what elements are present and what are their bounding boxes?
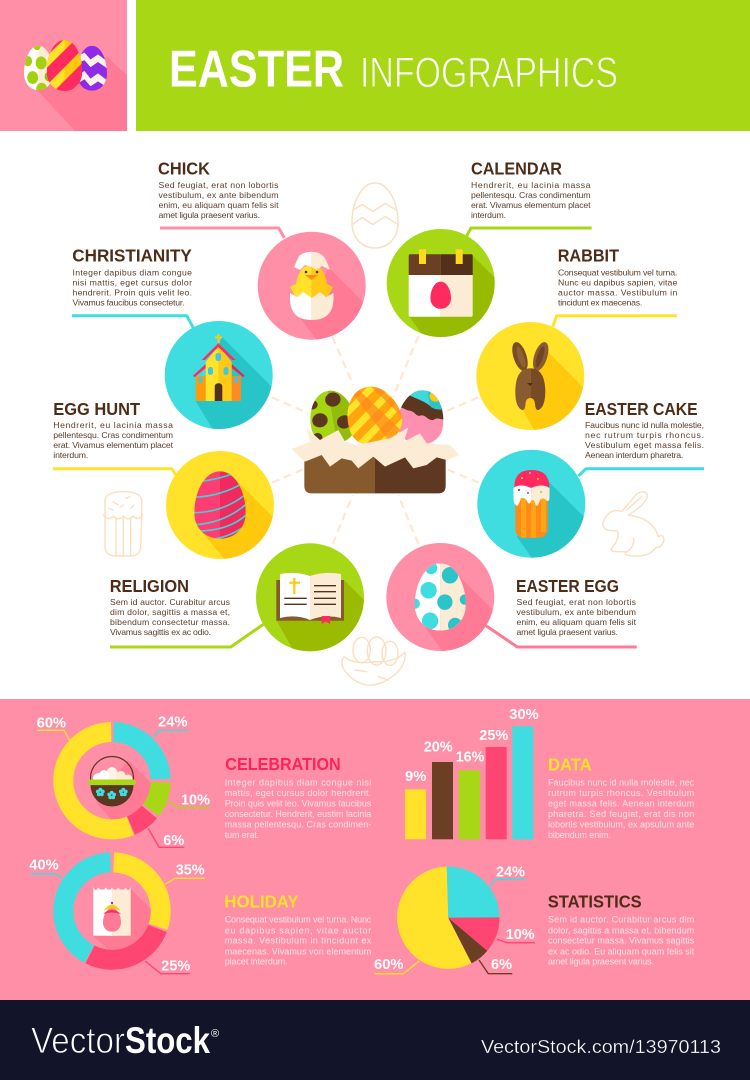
- body: data: pharetra. Sed feugiat, erat dis non: [548, 809, 694, 819]
- text: rabbit: [558, 268, 677, 308]
- body: holiday: eu dapibus sapien, vitae auctor: [225, 925, 371, 935]
- body: statistics: amet ligula praesent varius.: [548, 957, 654, 967]
- body: celebration: mattis, eget cursus dolor hendrerit.: [225, 788, 371, 798]
- heading: egg hunt: EGG HUNT: [53, 399, 140, 419]
- text: chick: [158, 180, 279, 220]
- bar: 20%: 20%: [424, 740, 453, 756]
- body: data: rutrum turpis rhoncus. Vestibulum: [548, 788, 694, 798]
- dashed connectors to center: [272, 336, 479, 544]
- label: 60%: [374, 957, 419, 974]
- heading: christianity: CHRISTIANITY: [72, 246, 192, 266]
- spotted green egg: [310, 390, 352, 442]
- chart: holiday donut: [29, 857, 205, 975]
- header: icon tile: [0, 0, 127, 131]
- body: holiday: Consequat vestibulum vel turna. Nunc: [225, 915, 372, 925]
- url: image id: VectorStock.com/13970113: [481, 1036, 721, 1057]
- frosting: [292, 427, 459, 468]
- label: 10%: [168, 792, 210, 808]
- text: christianity: Integer dapibus diam congue: [72, 268, 192, 278]
- heading: celebration: CELEBRATION: [225, 754, 341, 774]
- text: calendar: interdum.: [471, 210, 506, 220]
- body: celebration: Proin quis velit leo. Vivamus faucibus: [225, 798, 372, 808]
- text: easter egg: vestibulum, ex ante bibendum: [516, 607, 636, 617]
- icon: calendar circle: [386, 229, 495, 337]
- text: easter cake: nec rutrum turpis rhoncus.: [585, 430, 704, 440]
- text: religion: Vivamus sagittis ex ac odio.: [110, 627, 211, 637]
- connector: calendar: [467, 228, 592, 236]
- text: easter egg: Sed feugiat, erat non lobortis: [516, 597, 637, 607]
- pink capped egg: [399, 390, 444, 444]
- decorative outline: cake: [103, 492, 143, 556]
- decorative outline: egg: [352, 183, 398, 248]
- connector: chick: [160, 228, 284, 238]
- heading: data: DATA: [548, 755, 592, 775]
- body: statistics: Sem id auctor. Curabitur arcus dim: [548, 915, 694, 925]
- text: easter cake: Faucibus nunc id nulla molestie,: [585, 420, 704, 430]
- text: egg hunt: Hendrerit, eu lacinia massa: [53, 420, 173, 430]
- logo: VectorStock: Stock: [125, 1020, 210, 1061]
- icon: striped egg circle: [166, 451, 274, 559]
- text: egg hunt: erat. Vivamus elementum placet: [53, 440, 174, 450]
- connector: easter cake: [578, 469, 704, 476]
- chart: data bars: [405, 707, 539, 839]
- icon: spotted egg: [24, 46, 50, 90]
- pink statistics band: [0, 699, 750, 1000]
- panel: rabbit: [476, 250, 677, 430]
- text: rabbit: tincidunt ex maecenas.: [558, 298, 642, 308]
- icon: purple zigzag egg: [77, 46, 107, 91]
- body: holiday: placet interdum.: [225, 957, 288, 967]
- heading: holiday: HOLIDAY: [224, 891, 299, 911]
- text: christianity: hendrerit. Proin quis velit leo.: [72, 288, 192, 298]
- icon: chick circle: [258, 232, 366, 340]
- text: religion: dim dolor, sagittis a massa et,: [110, 607, 230, 617]
- striped orange egg: [347, 386, 402, 444]
- label: 10%: 10%: [181, 792, 210, 808]
- text: chick: Sed feugiat, erat non lobortis: [158, 180, 279, 190]
- body: holiday: [225, 915, 372, 967]
- text: easter cake: [585, 420, 704, 460]
- icon: church circle: [164, 321, 273, 429]
- text: easter egg: [516, 597, 637, 637]
- text: egg hunt: interdum.: [53, 450, 88, 460]
- text: calendar: [471, 180, 591, 220]
- label: 24%: [153, 715, 188, 737]
- body: holiday: massa. Vestibulum in tincidunt ex: [225, 936, 372, 946]
- icon: egg card: [93, 887, 151, 950]
- text: chick: enim, eu aliquam quam felis sit: [158, 200, 279, 210]
- panel: calendar: [386, 162, 592, 337]
- text: christianity: [72, 268, 192, 308]
- label: 6%: 6%: [491, 957, 512, 973]
- header: title banner: [136, 0, 750, 131]
- label: 24%: 24%: [496, 865, 525, 881]
- label: 6%: [479, 957, 512, 974]
- panel: religion: [110, 543, 364, 652]
- label: 24%: 24%: [158, 715, 188, 731]
- text: easter egg: amet ligula praesent varius.: [516, 627, 618, 637]
- connector: religion: [110, 624, 263, 647]
- bar: 25%: 25%: [479, 728, 508, 744]
- connector: egg hunt: [53, 469, 176, 475]
- text: easter cake: Vestibulum eget massa felis.: [585, 440, 704, 450]
- body: celebration: Integer dapibus diam congue nisi: [225, 777, 371, 787]
- label: 60%: 60%: [37, 716, 66, 732]
- bar: 30%: 30%: [509, 707, 539, 723]
- logo: VectorStock: ®: [211, 1028, 219, 1040]
- label: 40%: 40%: [29, 857, 59, 873]
- text: data: [548, 755, 695, 840]
- icon: striped egg: [46, 40, 82, 91]
- text: holiday: [224, 891, 372, 967]
- text: easter cake: Aenean interdum pharetra.: [585, 450, 683, 460]
- heading: religion: RELIGION: [110, 576, 189, 596]
- label: 35%: [165, 862, 205, 884]
- heading: calendar: CALENDAR: [471, 158, 562, 178]
- text: rabbit: Consequat vestibulum vel turna.: [558, 268, 677, 278]
- body: statistics: [548, 915, 695, 967]
- icon: rabbit circle: [476, 322, 584, 430]
- heading: easter cake: EASTER CAKE: [585, 399, 698, 419]
- label: 25%: [145, 959, 190, 975]
- label: 24%: [490, 865, 525, 886]
- panel: egg hunt: [53, 403, 274, 559]
- connector: rabbit: [553, 316, 677, 327]
- cake body: [304, 455, 375, 493]
- heading: easter egg: EASTER EGG: [516, 576, 619, 596]
- panel: chick: [158, 162, 366, 340]
- heading: statistics: STATISTICS: [548, 891, 642, 911]
- text: calendar: erat. Vivamus elementum placet: [471, 200, 591, 210]
- body: data: lobortis vestibulum, ex apsulum ante: [548, 819, 694, 829]
- decorative outline: nest: [342, 637, 405, 685]
- text: celebration: [225, 754, 372, 840]
- text: religion: Sem id auctor. Curabitur arcus: [110, 597, 231, 607]
- heading: chick: CHICK: [158, 158, 210, 178]
- panel: easter egg: [386, 543, 637, 651]
- text: calendar: pellentesqu. Cras condimentum: [471, 190, 590, 200]
- text: egg hunt: [53, 420, 174, 460]
- icon: dotted egg circle: [386, 543, 494, 651]
- logo: VectorStock: Vector: [31, 1020, 125, 1061]
- footer: watermark bar: [0, 1000, 750, 1080]
- body: statistics: dolor, sagittis a massa et, bibendum: [548, 925, 694, 935]
- text: religion: [110, 597, 231, 637]
- body: data: [548, 777, 695, 840]
- bar: 16%: 16%: [456, 750, 484, 766]
- text: statistics: [548, 891, 695, 967]
- icon: book circle: [256, 543, 364, 652]
- text: religion: bibendum consectetur massa.: [110, 617, 230, 627]
- connector: easter egg: [486, 626, 637, 647]
- panel: christianity: [72, 250, 273, 429]
- body: data: Faucibus nunc id nulla molestie, nec: [548, 777, 695, 787]
- body: celebration: [225, 777, 372, 840]
- body: celebration: consectetur. Hendrerit, eustim lacinia: [225, 809, 371, 819]
- heading: INFOGRAPHICS: INFOGRAPHICS: [360, 49, 618, 97]
- label: 60%: 60%: [374, 957, 404, 973]
- bar: 9%: 9%: [405, 769, 426, 785]
- center illustration: eggs in cake: [292, 386, 460, 494]
- text: easter egg: enim, eu aliquam quam felis sit: [516, 617, 637, 627]
- body: data: bibendum enim.: [548, 830, 611, 840]
- text: calendar: Hendrerit, eu lacinia massa: [471, 180, 591, 190]
- text: chick: vestibulum, ex ante bibendum: [158, 190, 278, 200]
- body: statistics: ex ac odio. Eu aliquam quam felis sit: [548, 946, 695, 956]
- label: 60%: [37, 716, 69, 740]
- icon: basket: [88, 756, 151, 820]
- text: christianity: Vivamus faucibus consectetur.: [72, 298, 184, 308]
- body: statistics: consectetur massa. Vivamus sagittis: [548, 936, 695, 946]
- label: 6%: [148, 828, 184, 849]
- body: celebration: tum erat.: [225, 830, 259, 840]
- label: 25%: 25%: [161, 959, 190, 975]
- icon: cake circle: [477, 450, 586, 558]
- panel: easter cake: [477, 403, 704, 558]
- body: data: eget massa felis. Aenean interdum: [548, 798, 694, 808]
- heading: EASTER: EASTER: [169, 40, 344, 98]
- label: 40%: [29, 857, 62, 878]
- text: rabbit: Nunc eu dapibus sapien, vitae: [558, 278, 677, 288]
- label: 35%: 35%: [176, 862, 205, 878]
- chart: statistics pie: [374, 865, 535, 974]
- text: rabbit: auctor massa. Vestibulum in: [558, 288, 677, 298]
- text: egg hunt: pellentesqu. Cras condimentum: [53, 430, 173, 440]
- connector: christianity: [72, 316, 193, 328]
- label: 6%: 6%: [163, 833, 184, 849]
- text: christianity: nisi mattis, eget cursus dolor: [72, 278, 192, 288]
- logo: VectorStock: [31, 1020, 219, 1061]
- body: celebration: massa pellentesqu. Cras condimen-: [225, 819, 371, 829]
- body: holiday: maecenas. Vivamus von elementum: [225, 946, 371, 956]
- heading: rabbit: RABBIT: [558, 246, 619, 266]
- text: chick: amet ligula praesent varius.: [158, 210, 260, 220]
- label: 10%: 10%: [506, 927, 535, 943]
- chart: celebration donut: [37, 715, 210, 849]
- decorative outline: rabbit: [603, 492, 664, 556]
